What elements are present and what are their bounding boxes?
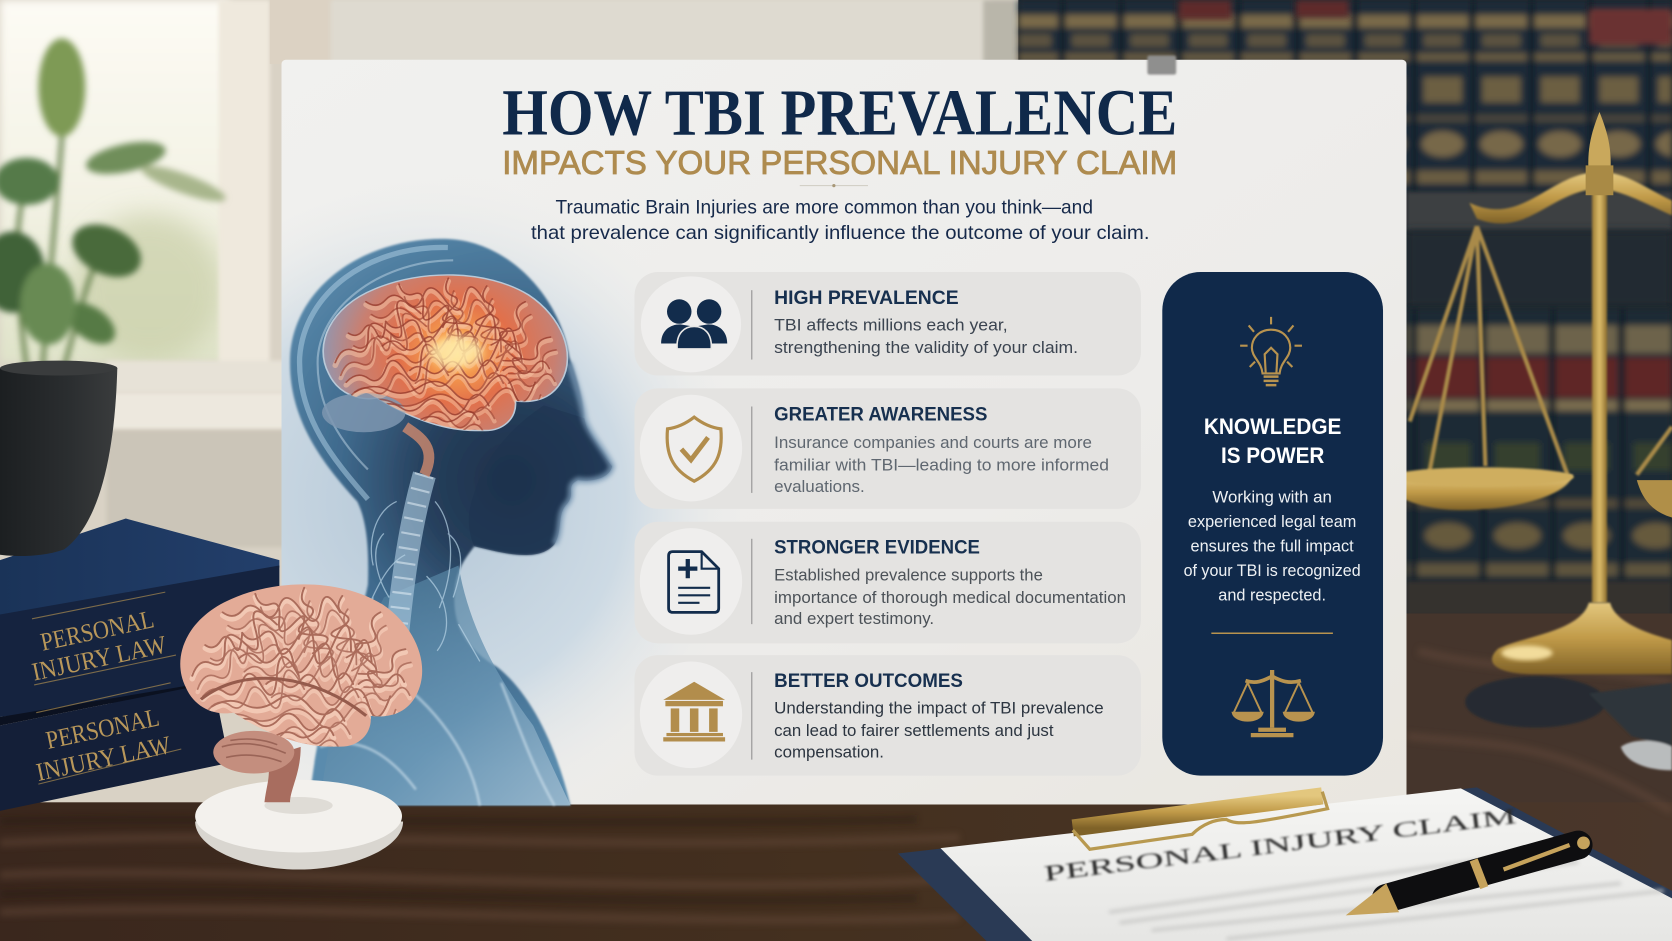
card text (774, 433, 1109, 496)
form title: PERSONAL INJURY CLAIM (1043, 803, 1518, 886)
icon: light bulb (1240, 317, 1302, 385)
card text: TBI affects millions each year, (774, 316, 1008, 335)
panel heading: IS POWER (1221, 443, 1324, 468)
card: stronger evidence (634, 522, 1141, 643)
card text: familiar with TBI—leading to more informed (774, 455, 1109, 475)
icon: courthouse (663, 682, 725, 741)
card text (774, 565, 1126, 628)
icon: scales of justice (1233, 670, 1314, 735)
title: HOW TBI PREVALENCE (502, 76, 1177, 149)
card text: importance of thorough medical documentation (774, 588, 1126, 607)
panel text: and respected. (1218, 586, 1326, 605)
intro text: that prevalence can significantly influence the outcome of your claim. (531, 222, 1150, 244)
card text: evaluations. (774, 477, 865, 496)
card text: Established prevalence supports the (774, 565, 1043, 584)
title (502, 76, 1177, 182)
magnifier on desk (1465, 676, 1672, 770)
model brain on stand (180, 584, 422, 870)
panel: knowledge is power (1162, 272, 1383, 776)
intro text: Traumatic Brain Injuries are more common than you think—and (556, 196, 1093, 218)
panel text: of your TBI is recognized (1184, 561, 1361, 580)
book spine text (29, 604, 174, 787)
potted plant (0, 38, 229, 556)
card: greater awareness (634, 388, 1141, 509)
book spine text: PERSONAL (43, 702, 162, 755)
card heading: STRONGER EVIDENCE (774, 538, 980, 559)
glowing brain (322, 275, 567, 437)
background: bookshelf (1018, 0, 1672, 640)
book spine text: PERSONAL (38, 604, 157, 657)
card text: strengthening the validity of your claim. (774, 338, 1078, 357)
icon: medical document (669, 552, 719, 612)
clipboard with claim form (898, 787, 1672, 941)
card text (774, 316, 1078, 357)
card text: Understanding the impact of TBI prevalence (774, 699, 1104, 718)
panel text: Working with an (1212, 488, 1332, 507)
card text: and expert testimony. (774, 609, 934, 628)
book spine text: INJURY LAW (34, 730, 174, 787)
card: high prevalence (634, 272, 1141, 376)
card heading: HIGH PREVALENCE (774, 288, 959, 309)
intro text (531, 184, 1150, 244)
panel heading: KNOWLEDGE (1204, 414, 1342, 439)
card heading: GREATER AWARENESS (774, 404, 988, 425)
icon: people (661, 299, 727, 349)
desk (0, 613, 1672, 941)
card: better outcomes (634, 655, 1141, 776)
card text: Insurance companies and courts are more (774, 433, 1092, 452)
medical figure: translucent head with glowing brain (290, 239, 612, 806)
display board (282, 55, 1406, 804)
card text (774, 699, 1104, 761)
spinal column (397, 475, 424, 640)
pen (1346, 836, 1590, 915)
icon: shield with check (667, 417, 721, 481)
card text: can lead to fairer settlements and just (774, 721, 1054, 740)
card text: compensation. (774, 742, 884, 761)
card heading: BETTER OUTCOMES (774, 671, 963, 692)
subtitle: IMPACTS YOUR PERSONAL INJURY CLAIM (502, 145, 1177, 182)
stand (195, 780, 403, 870)
clip (1073, 792, 1328, 849)
book spine text: INJURY LAW (29, 630, 170, 687)
face rim light (554, 363, 612, 544)
brass scales (1390, 112, 1672, 674)
panel text: experienced legal team (1188, 512, 1356, 531)
panel text (1184, 488, 1361, 605)
law books stack (0, 519, 279, 811)
panel heading (1204, 414, 1342, 468)
panel text: ensures the full impact (1191, 537, 1354, 556)
